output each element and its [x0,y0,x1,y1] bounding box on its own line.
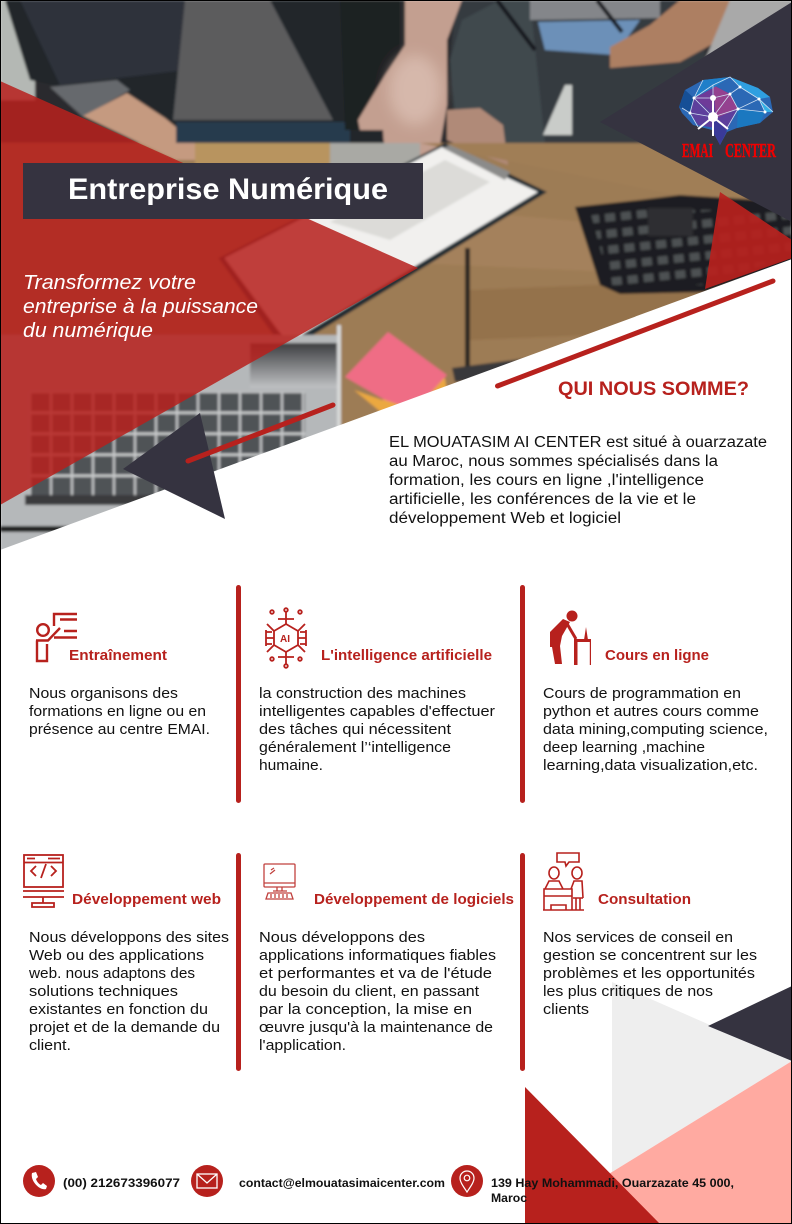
icon: AI chip [266,608,306,668]
body: l'application. [259,1038,346,1054]
decorative triangle: pink [525,1061,792,1224]
decorative triangle: pale grey [612,982,792,1172]
heading: L'intelligence artificielle [321,648,492,664]
divider top 2 [520,585,525,803]
body [259,686,495,774]
accent line left [188,405,333,461]
consultation body text: clients [543,1002,589,1018]
body [28,930,229,1054]
body: formations en ligne ou en [29,704,206,720]
accent line right [498,281,773,386]
panel: developpement de logiciels [259,864,514,1054]
body: data mining,computing science, [543,722,768,738]
consultation body text: problèmes et les opportunités [543,966,755,982]
about text: au Maroc, nous sommes spécialisés dans la [389,453,718,470]
phone number: (00) 212673396077 [63,1178,180,1190]
divider bottom 1 [236,853,241,1071]
body [259,930,496,1054]
heading: Entraînement [69,648,167,664]
decorative triangle: red [525,1087,660,1224]
body: solutions techniques [29,984,178,1000]
consultation body text: Nos services de conseil en [543,930,733,946]
decorative triangle: dark [708,986,792,1061]
body: Nous développons des sites [29,930,229,946]
body: du besoin du client, en passant [259,984,479,1000]
heading: Cours en ligne [605,648,709,664]
heading: Développement de logiciels [314,892,514,908]
body: Nous organisons des [29,686,178,702]
body: projet et de la demande du [29,1020,220,1036]
consultation body text [543,930,757,1018]
panel: entrainement [29,614,210,738]
hero photo: desk scene [0,0,792,560]
dark triangle top right [600,2,792,222]
icon: trainer [36,614,77,661]
body: applications informatiques fiables [259,948,496,964]
tagline: du numérique [23,320,153,342]
icon: desktop computer [264,864,295,899]
icon: two people talking [543,853,584,910]
body: généralement l’‘intelligence [259,740,451,756]
icon: person at desk [550,610,591,665]
body: python et autres cours comme [543,704,759,720]
body: learning,data visualization,etc. [543,758,758,774]
tagline [23,272,258,342]
heading: qui nous somme: QUI NOUS SOMME? [558,378,749,400]
icon: envelope [191,1165,223,1197]
body [29,686,210,738]
heading: Consultation [598,892,691,908]
logo wordmark: EMAI [682,140,713,162]
about text: artificielle, les conférences de la vie et le [389,491,696,508]
body: intelligentes capables d'effectuer [259,704,495,720]
heading: Développement web [72,892,221,908]
body: et performantes et va de l'étude [259,966,492,982]
body: web. nous adaptons des [28,966,195,982]
about text: formation, les cours en ligne ,l'intelligence [389,472,704,489]
address: 139 Hay Mohammadi, Ouarzazate 45 000, [491,1178,734,1190]
body: Web ou des applications [29,948,204,964]
body: deep learning ,machine [543,740,705,756]
email address: contact@elmouatasimaicenter.com [239,1178,445,1190]
about text: EL MOUATASIM AI CENTER est situé à ouarzazate [389,434,767,451]
title bar [23,163,423,219]
tagline: entreprise à la puissance [23,296,258,318]
body: humaine. [259,758,323,774]
contact: phone [23,1165,180,1197]
icon: brain [679,77,773,145]
panel: consultation [543,853,691,910]
divider top 1 [236,585,241,803]
icon: phone [23,1165,55,1197]
tagline: Transformez votre [23,272,196,294]
body: présence au centre EMAI. [29,722,210,738]
logo: EMAI CENTER [679,77,776,162]
address: Maroc [491,1193,528,1205]
dark triangle left [123,413,225,519]
body [543,686,768,774]
body: la construction des machines [259,686,466,702]
contact: email [191,1165,445,1197]
address [491,1178,734,1205]
contact: address [451,1165,734,1205]
body: Nous développons des [259,930,425,946]
logo wordmark [682,140,776,162]
body: par la conception, la mise en [259,1002,472,1018]
red translucent triangle left [0,81,418,505]
panel: intelligence artificielle [259,608,495,774]
icon: location pin [451,1165,483,1197]
divider bottom 2 [520,853,525,1071]
title: Entreprise Numérique [68,173,388,206]
consultation body text: gestion se concentrent sur les [543,948,757,964]
body: Cours de programmation en [543,686,741,702]
body: existantes en fonction du [29,1002,208,1018]
body: des tâches qui nécessitent [259,722,451,738]
consultation body text: les plus critiques de nos [543,984,713,1000]
red triangle right [705,192,792,289]
panel: cours en ligne [543,610,768,774]
icon: code window [23,855,64,907]
icon: AI chip: AI [280,634,290,645]
panel: developpement web [23,855,229,1054]
about text: développement Web et logiciel [389,510,621,527]
about text [389,434,767,527]
body: œuvre jusqu'à la maintenance de [259,1020,493,1036]
white lower page area [0,259,792,1224]
body: client. [29,1038,71,1054]
